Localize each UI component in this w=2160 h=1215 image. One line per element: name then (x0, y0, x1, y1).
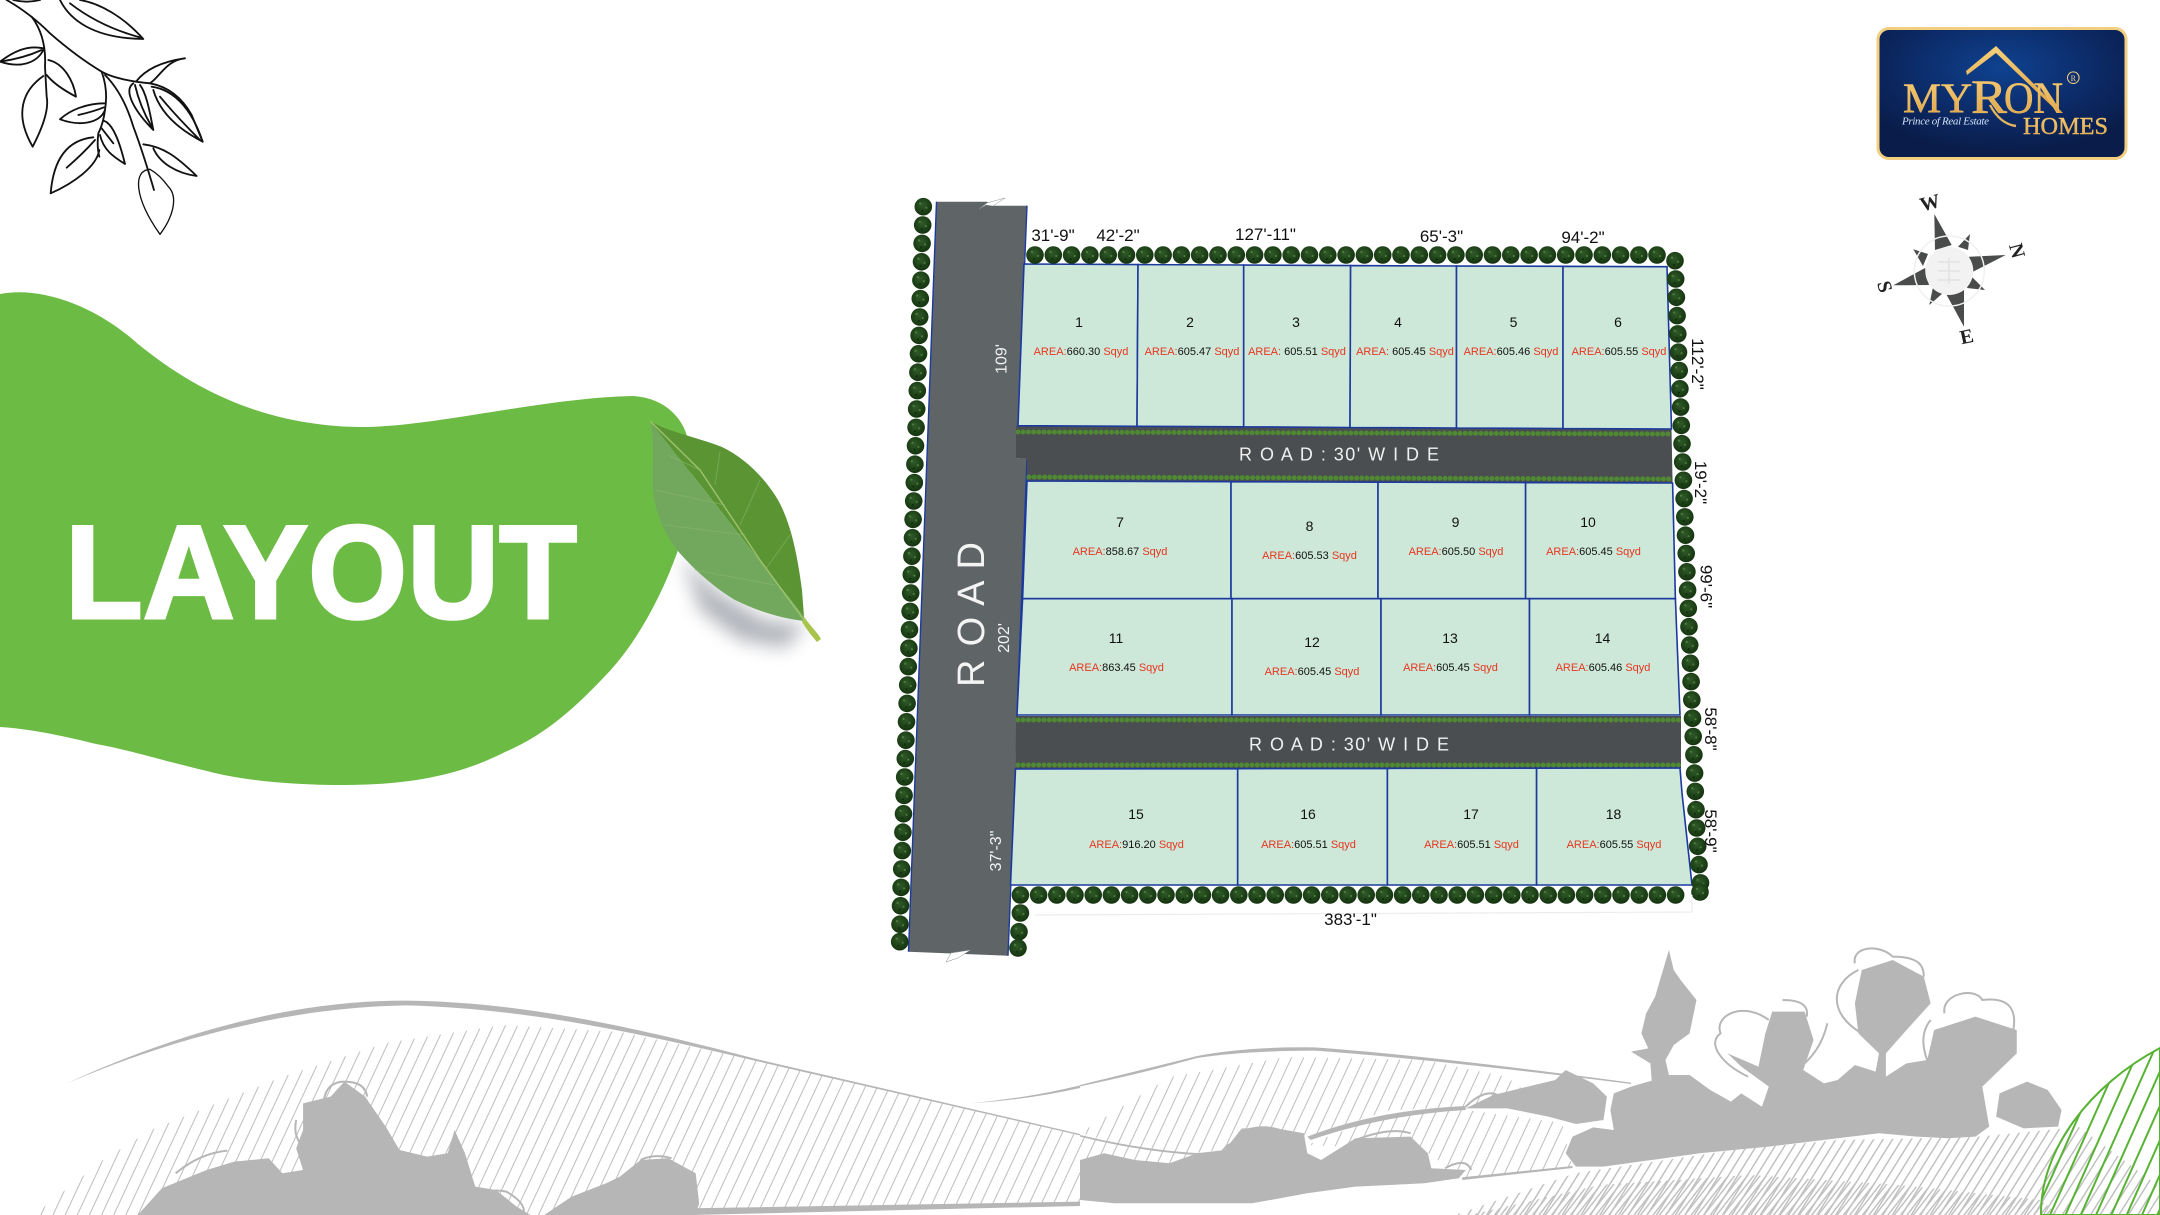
hill hatching: back hill (1080, 1057, 1530, 1153)
plot 10: 10 (1580, 514, 1596, 530)
plot 3: AREA: 605.51 Sqyd (1248, 346, 1346, 358)
plot boundary faint line (1035, 895, 1692, 915)
dimension labels: 127'-11" (1235, 225, 1296, 244)
plot 16: AREA:605.51 Sqyd (1261, 839, 1356, 851)
plot 15 (1010, 769, 1238, 885)
dimension labels: 99'-6" (1696, 565, 1716, 608)
plot 18: AREA:605.55 Sqyd (1567, 839, 1661, 851)
plot 17 (1387, 768, 1537, 885)
plot 10: AREA:605.45 Sqyd (1546, 546, 1641, 558)
dimension labels: 109' (994, 344, 1010, 374)
compass rose: S (1872, 279, 1896, 295)
plot 2 (1137, 265, 1244, 427)
plot 11: 11 (1109, 630, 1123, 646)
plot 15: 15 (1128, 806, 1144, 822)
plot 3: 3 (1292, 314, 1300, 330)
plot 18 (1537, 768, 1692, 885)
corner leaf: green hatched circle (2041, 1048, 2160, 1215)
logo: Myron Homes: Prince of Real Estate (1901, 115, 1989, 127)
dimension labels: 58'-8" (1701, 707, 1720, 751)
plot 5: AREA:605.46 Sqyd (1464, 346, 1558, 358)
plot 11 (1017, 599, 1232, 715)
green leaf with shadow (650, 421, 821, 648)
logo: Myron Homes: ON (2004, 74, 2063, 123)
plot 1: 1 (1075, 314, 1083, 330)
plot 6: 6 (1614, 314, 1622, 330)
hill hatching: left hill (34, 1025, 1197, 1215)
plot 13 (1381, 599, 1530, 715)
hill hatching: foreground hill (1455, 1127, 2160, 1215)
tree hedge: left (891, 198, 932, 950)
dimension labels: 19'-2" (1691, 461, 1710, 504)
dimension labels: 383'-1" (1324, 910, 1377, 929)
plot 14: AREA:605.46 Sqyd (1556, 662, 1650, 674)
plot 1: AREA:660.30 Sqyd (1034, 346, 1128, 358)
plot 7 (1023, 481, 1231, 599)
cross road 2: R O A D : 30' W I D E (1249, 734, 1449, 754)
plot 12: AREA:605.45 Sqyd (1265, 666, 1359, 678)
road label: R O A D (951, 542, 993, 687)
dimension labels: 58'-9" (1701, 809, 1720, 853)
dimension labels: 31'-9" (1031, 226, 1075, 245)
logo: Myron Homes: R (1971, 71, 2007, 124)
plot 13: AREA:605.45 Sqyd (1403, 662, 1498, 674)
cross road 1 (1016, 426, 1673, 483)
plot 9: AREA:605.50 Sqyd (1409, 546, 1503, 558)
dimension labels: 37'-3" (988, 831, 1005, 871)
compass rose: E (1958, 325, 1976, 349)
logo: Myron Homes (1878, 28, 2126, 158)
plot 9: 9 (1452, 514, 1460, 530)
plot 8 (1231, 482, 1378, 599)
plot 17: 17 (1463, 806, 1479, 822)
cross road 2 (1016, 716, 1681, 769)
cross road 1: R O A D : 30' W I D E (1239, 444, 1439, 464)
plot 11: AREA:863.45 Sqyd (1069, 662, 1164, 674)
compass rose: W (1918, 190, 1943, 216)
dimension labels (988, 225, 1720, 929)
logo: Myron Homes: MY (1903, 77, 1972, 123)
dimension labels: 65'-3" (1420, 227, 1463, 246)
plot 9 (1378, 482, 1526, 599)
dimension labels: 202' (996, 623, 1013, 653)
compass rose (1872, 190, 2029, 349)
plot 7: AREA:858.67 Sqyd (1073, 546, 1167, 558)
logo: Myron Homes: HOMES (2023, 114, 2108, 140)
plot 12 (1232, 599, 1381, 715)
dimension labels: 42'-2" (1096, 226, 1140, 245)
hill ridge and tree silhouettes, left (67, 1001, 1080, 1215)
branch line art (0, 0, 203, 234)
plot 10 (1526, 483, 1675, 599)
hill ridges and tree silhouettes, right (1080, 948, 2062, 1203)
plot 4 (1350, 266, 1456, 428)
plot 6: AREA:605.55 Sqyd (1572, 346, 1666, 358)
tree hedge: right (1666, 252, 1709, 892)
plot 1 (1018, 264, 1138, 426)
plot 8: AREA:605.53 Sqyd (1262, 550, 1357, 562)
plot 7: 7 (1116, 514, 1124, 530)
plot 17: AREA:605.51 Sqyd (1424, 839, 1519, 851)
plot 2: 2 (1186, 314, 1194, 330)
plot 16 (1238, 768, 1387, 885)
plot 3 (1244, 265, 1351, 428)
landscape illustration (34, 948, 2160, 1215)
hill hatching: dense foreground (1470, 1175, 2060, 1215)
plot 15: AREA:916.20 Sqyd (1089, 839, 1184, 851)
plot 14: 14 (1595, 630, 1610, 646)
hill hatching: middle hill (1307, 1110, 1572, 1178)
green blob panel (0, 292, 691, 785)
heading: LAYOUT: LAYOUT (65, 499, 577, 647)
compass rose: N (2004, 241, 2029, 261)
dimension labels: 112'-2" (1688, 338, 1707, 390)
tree hedge: bottom (1009, 883, 1709, 957)
plot 18: 18 (1606, 806, 1621, 822)
plot 8: 8 (1306, 518, 1314, 534)
plot 16: 16 (1300, 806, 1316, 822)
plot 13: 13 (1442, 630, 1458, 646)
plot 12: 12 (1304, 634, 1320, 650)
plot 6 (1563, 266, 1672, 429)
tree hedge: top (1026, 246, 1666, 264)
plot 5: 5 (1510, 314, 1518, 330)
logo: Myron Homes: R (2071, 74, 2077, 83)
plot 14 (1530, 599, 1680, 715)
main road (908, 198, 1027, 962)
plot 4: 4 (1394, 314, 1402, 330)
plot 4: AREA: 605.45 Sqyd (1356, 346, 1454, 358)
plot 2: AREA:605.47 Sqyd (1145, 346, 1239, 358)
dimension labels: 94'-2" (1561, 228, 1605, 247)
plot 5 (1456, 266, 1563, 428)
